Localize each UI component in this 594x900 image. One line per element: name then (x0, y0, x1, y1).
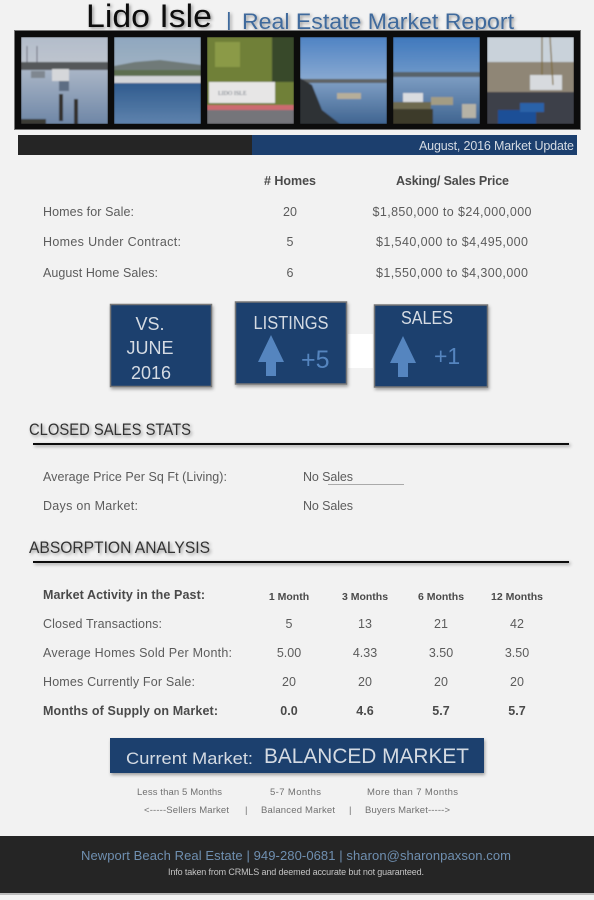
box: versus June 2016 (110, 304, 212, 386)
row: closed transactions: 21 (434, 617, 448, 631)
title: Real Estate Market Report (242, 9, 514, 34)
closed sales stats rows: Days on Market: (43, 499, 138, 513)
footer: Info taken from CRMLS and deemed accurate but not guaranteed. (168, 867, 424, 877)
row: average homes sold: 4.33 (353, 646, 377, 660)
box: versus June 2016: JUNE (126, 338, 174, 358)
closed sales stats rows: No Sales (303, 470, 353, 484)
row: closed transactions: 13 (358, 617, 372, 631)
footer: Newport Beach Real Estate | 949-280-0681 | sharon@sharonpaxson.com (81, 848, 511, 863)
row: months of supply: 0.0 (280, 704, 298, 718)
market legend: | (349, 805, 351, 816)
market legend (137, 787, 458, 816)
box: sales (374, 305, 488, 387)
photo: marina masts (487, 37, 574, 124)
photo: blue sky water (300, 37, 387, 124)
row: homes for sale: $1,850,000 to $24,000,000 (372, 205, 532, 219)
photo strip (14, 30, 580, 130)
closed sales stats rows: No Sales (303, 499, 353, 513)
header row: Market Activity in the Past: (43, 588, 205, 602)
row: average homes sold: 5.00 (277, 646, 301, 660)
row: under contract: Homes Under Contract: (43, 235, 181, 249)
market legend: 5-7 Months (270, 787, 321, 798)
row: home sales: August Home Sales: (43, 266, 158, 280)
row: homes currently for sale (43, 675, 524, 689)
box: sales: SALES (401, 308, 453, 328)
photo: harbor with boats (21, 37, 108, 124)
row: closed transactions: 5 (286, 617, 293, 631)
header row (43, 588, 543, 603)
title: | (226, 8, 232, 33)
header row: 1 Month (269, 591, 309, 603)
row: homes for sale (43, 205, 532, 219)
row: closed transactions (43, 617, 524, 631)
row: homes for sale: Homes for Sale: (43, 205, 134, 219)
row: months of supply: Months of Supply on Market: (43, 704, 218, 718)
white patch (348, 334, 373, 368)
row: home sales: $1,550,000 to $4,300,000 (376, 266, 528, 280)
heading: absorption analysis: ABSORPTION ANALYSIS (29, 538, 210, 557)
row: under contract: 5 (287, 235, 294, 249)
row: months of supply: 5.7 (432, 704, 450, 718)
market legend: | (245, 805, 247, 816)
current market banner: Current Market: (126, 749, 253, 768)
title (86, 0, 514, 34)
box: listings: LISTINGS (254, 313, 328, 333)
current market banner: BALANCED MARKET (264, 745, 469, 768)
box: versus June 2016: 2016 (131, 363, 171, 383)
row: average homes sold: 3.50 (505, 646, 529, 660)
date banner: August, 2016 Market Update (419, 139, 574, 153)
market legend: More than 7 Months (367, 787, 458, 798)
listings table (43, 174, 532, 280)
icon: up arrow (390, 336, 416, 377)
heading: closed sales stats: CLOSED SALES STATS (29, 420, 191, 439)
row: homes currently for sale: 20 (358, 675, 372, 689)
market legend: Buyers Market-----> (365, 805, 450, 816)
absorption table (43, 588, 543, 718)
header row: 6 Months (418, 591, 464, 603)
column headers: Asking/ Sales Price (396, 174, 509, 188)
column headers: # Homes (264, 174, 316, 188)
market legend: Less than 5 Months (137, 787, 222, 798)
photo: docks (393, 37, 480, 124)
row: average homes sold: Average Homes Sold Per Month: (43, 646, 232, 660)
closed sales stats rows: Average Price Per Sq Ft (Living): (43, 470, 227, 484)
icon: up arrow (258, 335, 284, 376)
row: homes for sale: 20 (283, 205, 297, 219)
row: home sales (43, 266, 528, 280)
row: closed transactions: Closed Transactions: (43, 617, 162, 631)
column headers (264, 174, 509, 188)
row: homes currently for sale: Homes Currently For Sale: (43, 675, 195, 689)
closed sales stats rows (43, 470, 404, 513)
row: homes currently for sale: 20 (282, 675, 296, 689)
row: under contract (43, 235, 528, 249)
photo: Lido Isle sign: LIDO ISLE (218, 91, 247, 97)
row: months of supply (43, 704, 526, 718)
date banner (18, 135, 577, 155)
header row: 3 Months (342, 591, 388, 603)
row: closed transactions: 42 (510, 617, 524, 631)
market legend: Balanced Market (261, 805, 335, 816)
photo: bay and hills (114, 37, 201, 124)
header row: 12 Months (491, 591, 543, 603)
box: listings (236, 302, 346, 384)
row: months of supply: 4.6 (356, 704, 374, 718)
box: versus June 2016: VS. (135, 314, 165, 334)
photo: Lido Isle sign (207, 37, 294, 124)
market legend: <-----Sellers Market (144, 805, 229, 816)
row: months of supply: 5.7 (508, 704, 526, 718)
current market banner (110, 738, 484, 773)
row: average homes sold (43, 646, 529, 660)
row: homes currently for sale: 20 (434, 675, 448, 689)
row: average homes sold: 3.50 (429, 646, 453, 660)
box: sales: +1 (434, 343, 460, 369)
row: home sales: 6 (287, 266, 294, 280)
row: under contract: $1,540,000 to $4,495,000 (376, 235, 528, 249)
row: homes currently for sale: 20 (510, 675, 524, 689)
footer (0, 836, 594, 895)
box: listings: +5 (301, 346, 330, 374)
